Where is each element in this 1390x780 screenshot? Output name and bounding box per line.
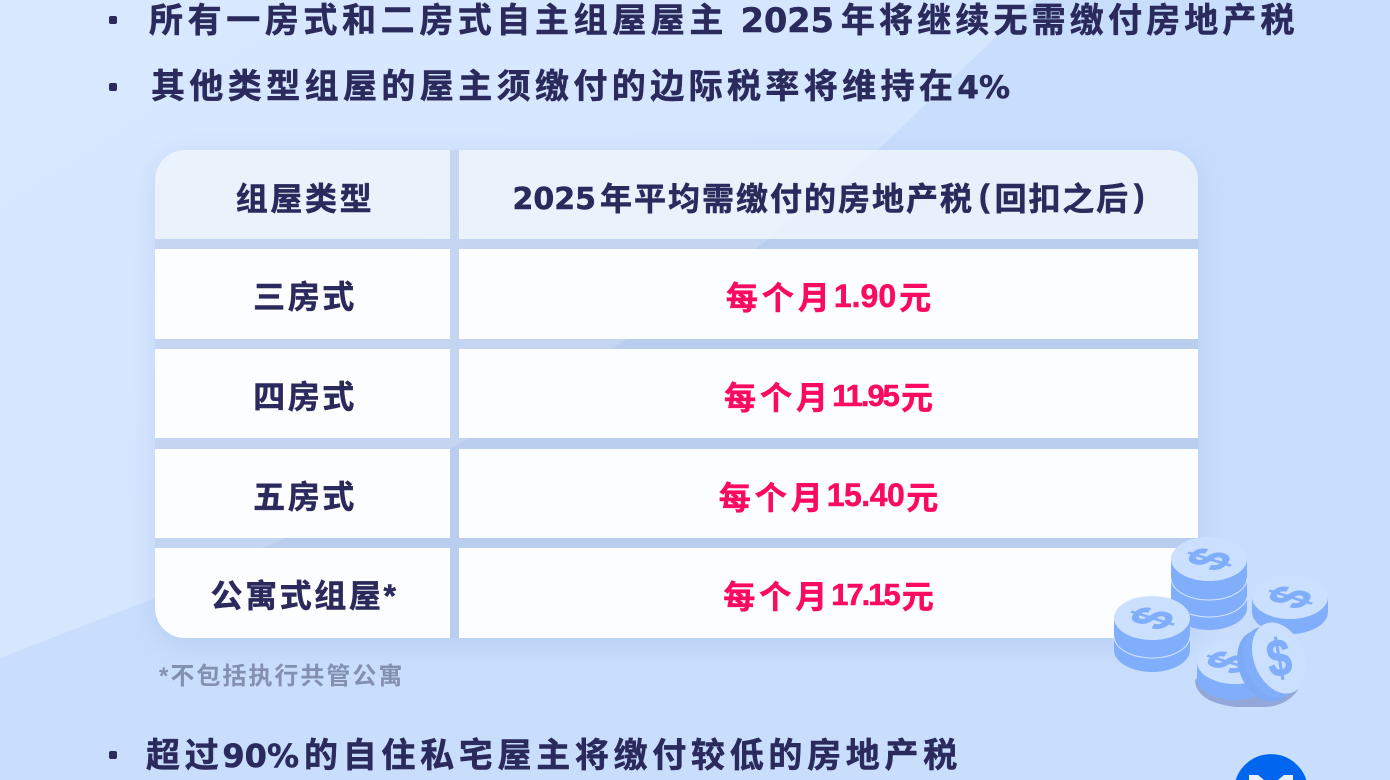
header: average tax payable: 2025 [512, 182, 596, 217]
bullet: marginal tax rate: 其他类型组屋的屋主须缴付的边际税率将维持在4% [151, 68, 1010, 106]
row label: executive [155, 548, 450, 638]
row value: 3-room: 每个月 [726, 280, 834, 316]
row value: 4-room [459, 349, 1198, 438]
row label: 3-room: 三房式 [253, 279, 357, 315]
footnote: *不包括执行共管公寓 [159, 663, 404, 690]
header: flat type: 组屋类型 [236, 180, 374, 216]
leaning coin: $ [1262, 628, 1296, 690]
table shadow backing [155, 150, 1198, 638]
left stack: $ [1117, 601, 1189, 635]
header: flat type [155, 150, 450, 239]
row value: 5-room: 每个月 [719, 480, 827, 516]
row value: executive: 17.15 [831, 577, 899, 612]
back stack: $ [1174, 542, 1246, 576]
row value: 5-room [459, 449, 1198, 538]
row label: 5-room [155, 449, 450, 538]
row value: executive: 每个月 [723, 579, 831, 615]
leaning coin [1227, 614, 1316, 710]
back stack [1171, 537, 1247, 630]
left stack [1114, 596, 1190, 672]
header: average tax payable [459, 150, 1198, 239]
right coin [1252, 575, 1328, 634]
bullet: private owners: 超过90%的自住私宅屋主将缴付较低的房地产税 [146, 737, 962, 775]
front coin [1193, 640, 1273, 700]
row label: 4-room [155, 349, 450, 438]
right coin: $ [1255, 580, 1327, 614]
row value: 3-room: 1.90 [834, 278, 896, 314]
row label: 3-room [155, 249, 450, 339]
front coin: $ [1193, 645, 1265, 679]
row label: executive: 公寓式组屋* [210, 578, 399, 614]
row value: 4-room: 每个月 [724, 380, 832, 416]
row label: 5-room: 五房式 [253, 478, 357, 514]
header: average tax payable: 回扣之后 [995, 180, 1130, 216]
row value: executive [459, 548, 1198, 638]
row value: 3-room: 元 [899, 280, 931, 316]
bullet: HDB owners exempt: 所有一房式和二房式自主组屋屋主 2025年将继续无需缴付房地产税 [149, 1, 1299, 40]
row value: executive: 元 [902, 579, 934, 615]
row value: 4-room: 11.95 [832, 378, 898, 412]
row value: 3-room [459, 249, 1198, 339]
row value: 5-room: 15.40 [827, 477, 904, 513]
header: average tax payable: ( [979, 178, 990, 214]
icon: coins [1114, 538, 1328, 707]
row value: 5-room: 元 [906, 480, 938, 516]
logo badge [1236, 754, 1306, 780]
row label: 4-room: 四房式 [253, 378, 357, 414]
row value: 4-room: 元 [901, 380, 933, 416]
header: average tax payable: ) [1134, 178, 1145, 214]
header: average tax payable: 年平均需缴付的房地产税 [600, 180, 974, 216]
table: property tax by flat type [150, 150, 1200, 646]
